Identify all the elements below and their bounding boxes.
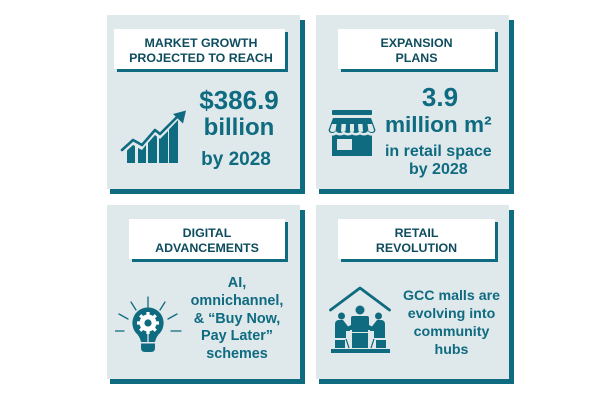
text: AI, omnichannel, Buy Now Pay Later	[191, 275, 283, 362]
panel: expansion plans	[316, 15, 514, 194]
value: $386.9: $386.9	[199, 85, 279, 115]
value: million m²: million m²	[385, 112, 492, 137]
icon: light bulb with gear	[115, 296, 182, 352]
text: AI, omnichannel, Buy Now Pay Later: AI,	[228, 275, 246, 291]
heading: market growth: MARKET GROWTH	[145, 36, 257, 50]
text: GCC malls community hubs: community	[414, 324, 489, 340]
heading: retail revolution: REVOLUTION	[376, 240, 457, 254]
text: AI, omnichannel, Buy Now Pay Later: omnichannel,	[191, 293, 283, 309]
icon: growth chart	[120, 110, 186, 163]
heading: expansion plans: PLANS	[396, 50, 438, 64]
text: GCC malls community hubs: hubs	[435, 342, 468, 358]
panel: retail revolution	[316, 205, 514, 384]
heading: market growth: PROJECTED TO REACH	[129, 50, 273, 64]
panel: market growth	[107, 15, 305, 194]
heading: digital advancements	[129, 219, 285, 259]
heading: digital advancements: DIGITAL	[183, 226, 231, 240]
icon: people in house	[329, 286, 391, 353]
text: in retail space by 2028: by 2028	[409, 160, 468, 178]
text: AI, omnichannel, Buy Now Pay Later: schemes	[206, 346, 268, 362]
panel: digital advancements	[107, 205, 305, 384]
heading: retail revolution	[338, 219, 495, 259]
text: GCC malls community hubs: GCC malls are	[403, 288, 500, 304]
value: billion: billion	[204, 114, 274, 140]
heading: digital advancements: ADVANCEMENTS	[155, 240, 259, 254]
icon: storefront	[328, 110, 376, 156]
text: by 2028: by 2028	[201, 149, 271, 170]
text: in retail space by 2028	[385, 142, 492, 178]
heading: market growth	[114, 29, 285, 69]
text: AI, omnichannel, Buy Now Pay Later: Pay Later”	[201, 328, 273, 344]
heading: retail revolution: RETAIL	[395, 226, 438, 240]
heading: expansion plans	[338, 29, 495, 69]
value: 3.9: 3.9	[422, 82, 458, 112]
text: GCC malls community hubs: evolving into	[408, 306, 495, 322]
text: in retail space by 2028: in retail space	[385, 142, 492, 160]
text: GCC malls community hubs	[403, 288, 500, 358]
text: AI, omnichannel, Buy Now Pay Later: & “Buy Now,	[194, 311, 280, 327]
heading: expansion plans: EXPANSION	[380, 36, 453, 50]
